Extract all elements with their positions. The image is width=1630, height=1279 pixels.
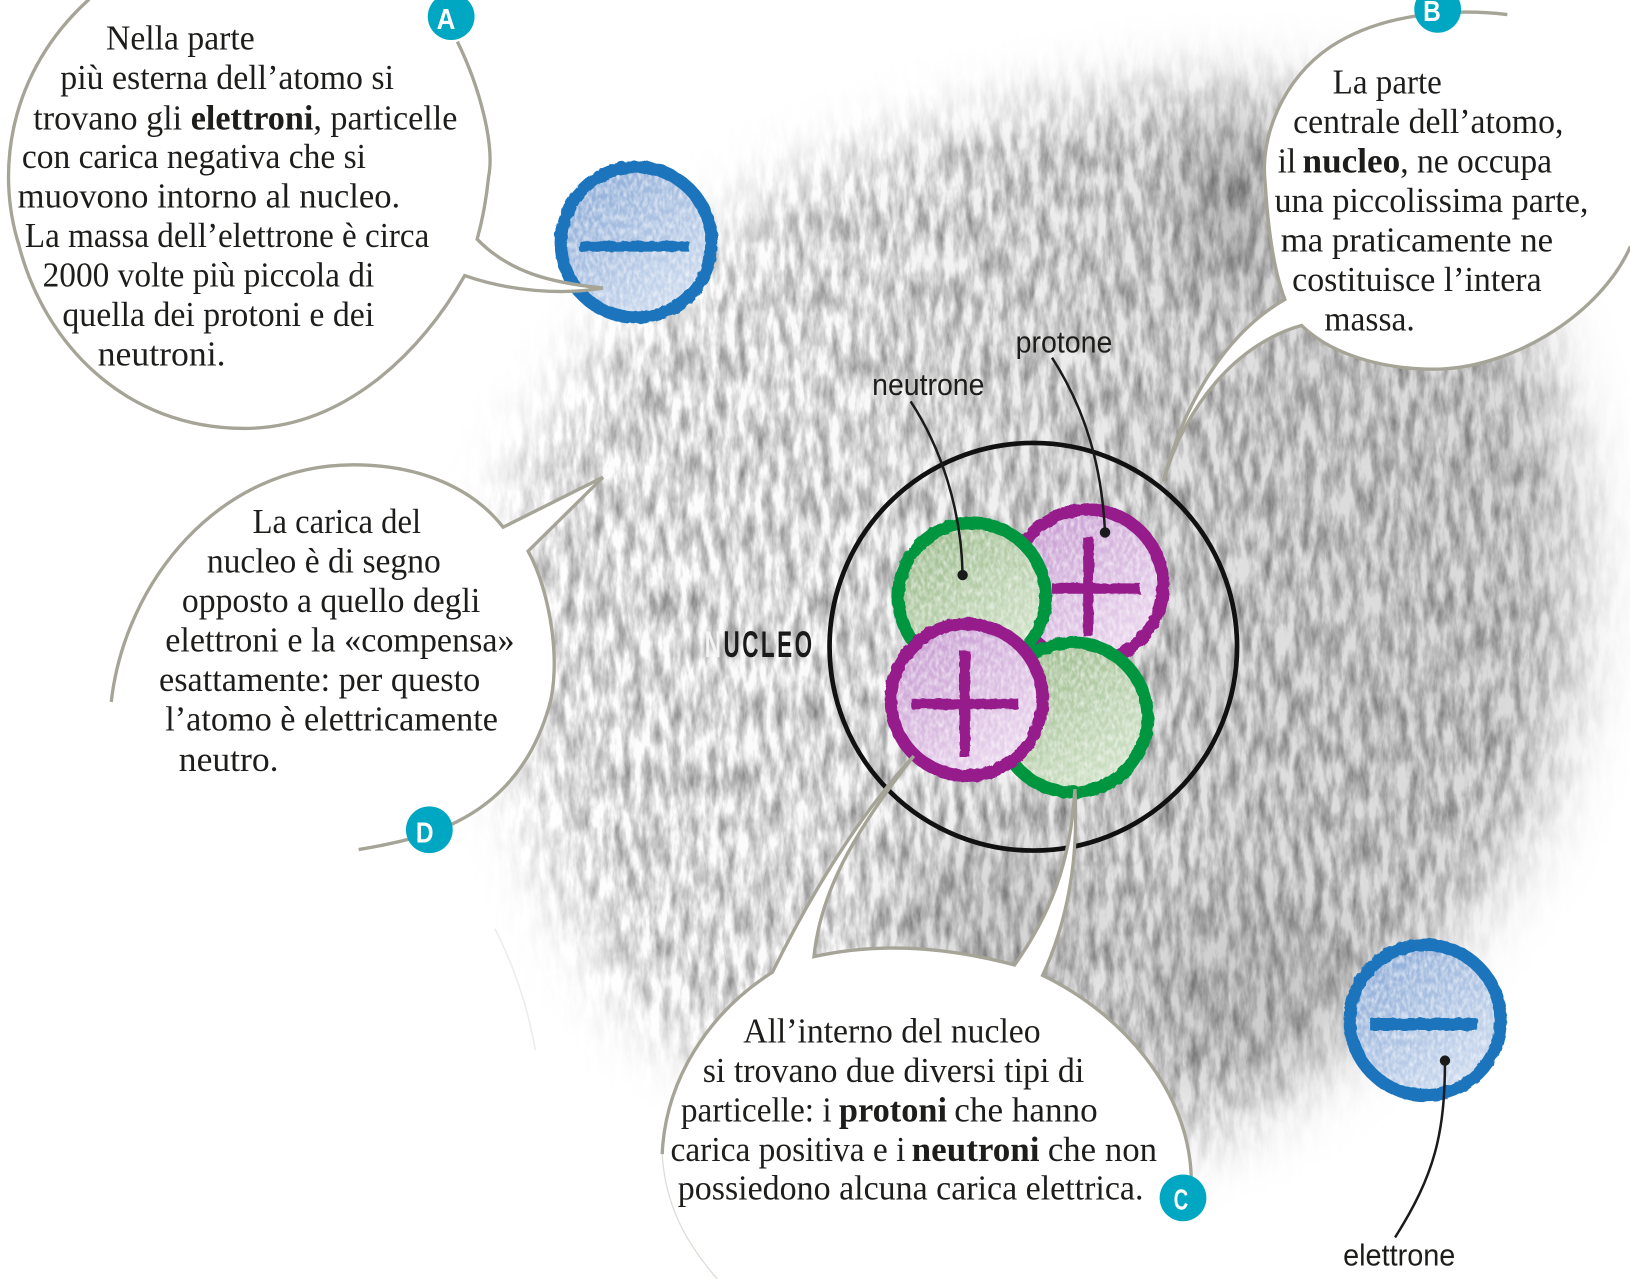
callout B text: il bbox=[1278, 141, 1296, 180]
callout D text: La carica del bbox=[253, 502, 421, 541]
callout B text: costituisce l’intera bbox=[1292, 260, 1542, 299]
neutron: upper bbox=[898, 523, 1046, 671]
callout D text: elettroni e la «compensa» bbox=[165, 621, 515, 660]
badge C bbox=[1160, 1174, 1206, 1221]
proton: lower bbox=[891, 624, 1043, 776]
background: pencil shading texture bbox=[488, 44, 1626, 1174]
neutron: lower bbox=[998, 643, 1148, 792]
callout D text bbox=[159, 502, 515, 779]
callout C text: particelle: i bbox=[681, 1091, 832, 1130]
badge D bbox=[406, 806, 453, 853]
callout B text: , ne occupa bbox=[1400, 141, 1552, 180]
panel: callout D bbox=[111, 465, 603, 853]
callout A text: La massa dell’elettrone è circa bbox=[25, 216, 430, 255]
callout D text: l’atomo è elettricamente bbox=[165, 700, 498, 739]
electron: lower right bbox=[1350, 945, 1501, 1095]
callout B text: una piccolissima parte, bbox=[1274, 181, 1588, 220]
callout B text: La parte bbox=[1333, 62, 1442, 101]
callout C text: protoni bbox=[839, 1091, 947, 1130]
label: protone with leader: protone bbox=[1016, 327, 1112, 360]
label: protone with leader bbox=[1016, 327, 1112, 538]
callout C text bbox=[671, 1012, 1157, 1208]
callout A text: trovano gli elettroni, particelle bbox=[33, 99, 457, 138]
callout A text: più esterna dell’atomo si bbox=[60, 58, 394, 97]
callout C text: possiedono alcuna carica elettrica. bbox=[678, 1169, 1143, 1208]
badge D: D bbox=[416, 817, 433, 849]
callout B text: massa. bbox=[1324, 299, 1415, 338]
callout D text: esattamente: per questo bbox=[159, 660, 480, 699]
callout D text: neutro. bbox=[179, 740, 279, 779]
callout A text: Nella parte bbox=[106, 19, 255, 58]
callout D text: opposto a quello degli bbox=[182, 581, 480, 620]
badge C: C bbox=[1174, 1184, 1188, 1216]
label: elettrone with leader bbox=[1343, 1055, 1455, 1272]
label: neutrone with leader: neutrone bbox=[872, 369, 984, 402]
label: NUCLEO: NUCLEO bbox=[705, 623, 815, 666]
faint remnant curve bbox=[495, 929, 535, 1050]
badge A bbox=[428, 0, 475, 40]
callout D text: nucleo è di segno bbox=[207, 542, 441, 581]
panel: callout B bbox=[1163, 0, 1630, 481]
callout A text: 2000 volte più piccola di bbox=[43, 256, 374, 295]
badge A: A bbox=[437, 4, 455, 36]
label: elettrone with leader: elettrone bbox=[1343, 1239, 1455, 1272]
panel: callout A bbox=[9, 0, 603, 428]
callout A text: con carica negativa che si bbox=[22, 137, 366, 176]
callout C text: che hanno bbox=[954, 1091, 1098, 1130]
callout C text: si trovano due diversi tipi di bbox=[703, 1051, 1084, 1090]
callout C text: neutroni bbox=[912, 1130, 1040, 1169]
callout B text bbox=[1274, 62, 1588, 338]
callout C text: che non bbox=[1048, 1130, 1157, 1169]
callout A text bbox=[18, 19, 457, 374]
atom nucleus circle bbox=[830, 443, 1237, 851]
callout B text: nucleo bbox=[1303, 141, 1400, 180]
panel: callout C bbox=[662, 756, 1206, 1279]
callout A text: muovono intorno al nucleo. bbox=[18, 177, 400, 216]
label: neutrone with leader bbox=[872, 369, 984, 580]
callout B text: centrale dell’atomo, bbox=[1293, 102, 1563, 141]
badge B bbox=[1414, 0, 1461, 33]
electron: upper left bbox=[561, 167, 712, 318]
proton: upper bbox=[1011, 510, 1163, 661]
callout C text: carica positiva e i bbox=[671, 1130, 906, 1169]
callout B text: ma praticamente ne bbox=[1281, 220, 1553, 259]
callout A text: quella dei protoni e dei bbox=[62, 295, 374, 334]
callout C text: All’interno del nucleo bbox=[743, 1012, 1041, 1051]
callout A text: neutroni. bbox=[98, 335, 226, 374]
